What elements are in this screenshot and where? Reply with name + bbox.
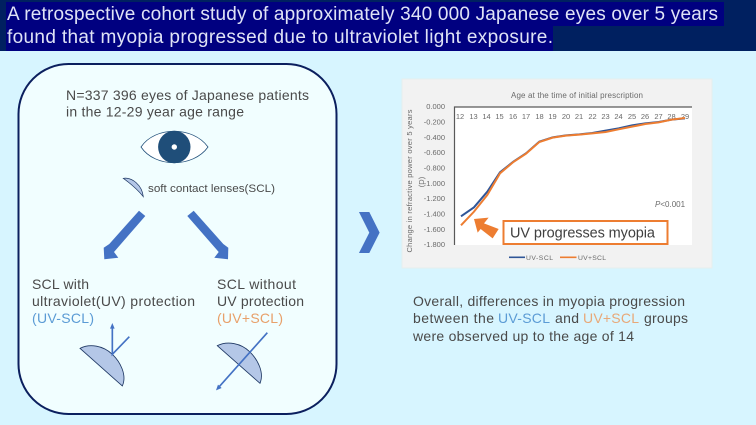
x axis labels: 19 — [548, 112, 557, 121]
conclusion text: between the — [413, 310, 494, 326]
arrow: chevron — [359, 212, 380, 253]
x axis labels: 26 — [641, 112, 649, 121]
x axis labels: 16 — [509, 112, 517, 121]
chart legend — [509, 255, 606, 262]
title: found that myopia progressed due to ultraviolet light exposure. — [7, 27, 553, 48]
x axis labels: 23 — [601, 112, 610, 121]
arrow: to UV+SCL — [187, 211, 228, 259]
label: SCL without UV protection: (UV+SCL) — [217, 310, 283, 326]
y axis labels — [424, 102, 445, 249]
y axis title: Change in refractive power over 5 years — [405, 109, 414, 252]
label: SCL without UV protection — [217, 276, 304, 326]
y axis labels: -0.600 — [424, 148, 445, 157]
study population text: N=337 396 eyes of Japanese patients — [66, 87, 309, 103]
x axis labels: 24 — [614, 112, 623, 121]
chart title: Age at the time of initial prescription — [511, 91, 643, 100]
x axis labels: 13 — [469, 112, 478, 121]
x axis labels: 25 — [628, 112, 636, 121]
label: SCL with UV protection: (UV-SCL) — [32, 310, 94, 326]
y axis labels: -0.200 — [424, 118, 445, 126]
study population text — [66, 87, 309, 120]
y axis labels: 0.000 — [426, 102, 445, 111]
x axis labels: 22 — [588, 112, 597, 121]
x axis labels: 20 — [562, 112, 570, 121]
study population text: in the 12-29 year age range — [66, 104, 244, 120]
x axis labels: 17 — [522, 112, 530, 121]
label: SCL with UV protection — [32, 276, 195, 326]
x axis labels: 21 — [575, 112, 583, 121]
y axis title: (D) — [417, 176, 426, 187]
chart legend: UV+SCL — [578, 255, 606, 262]
conclusion text: Overall, differences in myopia progression — [413, 293, 685, 309]
y axis labels: -1.800 — [424, 240, 445, 249]
x axis labels: 27 — [654, 112, 663, 121]
title: A retrospective cohort study of approximately 340 000 Japanese eyes over 5 years — [7, 4, 718, 25]
panel: study design — [18, 64, 336, 414]
line: UV-SCL — [461, 118, 685, 216]
icon: contact lens — [123, 178, 143, 197]
icon: lens transmitting UV — [216, 333, 267, 390]
lens label: soft contact lenses(SCL) — [148, 183, 275, 195]
arrow: to UV-SCL — [104, 211, 145, 259]
conclusion text — [412, 293, 688, 344]
header banner — [0, 0, 756, 51]
label: SCL without UV protection: SCL without — [217, 276, 296, 292]
p value: P<0.001 — [655, 200, 686, 209]
y axis title — [405, 109, 426, 252]
conclusion text: groups — [644, 310, 688, 326]
icon: lens reflecting UV — [80, 323, 129, 386]
conclusion text: UV-SCL — [498, 310, 550, 326]
conclusion text: UV+SCL — [583, 310, 639, 326]
y axis labels: -1.600 — [424, 225, 445, 234]
conclusion text: and — [555, 310, 579, 326]
panel: line chart — [402, 79, 712, 268]
icon: eye — [141, 131, 208, 163]
y axis labels: -1.400 — [424, 210, 445, 218]
x axis labels — [456, 112, 689, 121]
conclusion text: were observed up to the age of 14 — [412, 328, 634, 344]
arrow: orange callout pointer — [474, 218, 499, 238]
title — [7, 4, 718, 48]
y axis labels: -1.000 — [424, 179, 445, 188]
x axis labels: 18 — [535, 112, 544, 121]
y axis labels: -0.400 — [424, 133, 445, 142]
label: SCL with UV protection: ultraviolet(UV) protection — [32, 293, 195, 309]
chart legend: UV-SCL — [526, 255, 553, 262]
chart axes — [454, 107, 692, 245]
label: SCL without UV protection: UV protection — [217, 293, 304, 309]
x axis labels: 12 — [456, 112, 464, 121]
callout: UV progresses myopia: UV progresses myopia — [510, 226, 656, 242]
x axis labels: 14 — [482, 112, 491, 121]
callout: UV progresses myopia — [504, 221, 668, 244]
x axis labels: 29 — [681, 112, 689, 121]
y axis labels: -1.200 — [424, 194, 445, 203]
x axis labels: 15 — [495, 112, 504, 121]
y axis labels: -0.800 — [424, 164, 445, 172]
line: UV+SCL — [461, 118, 685, 225]
x axis labels: 28 — [667, 112, 676, 121]
label: SCL with UV protection: SCL with — [32, 276, 89, 292]
